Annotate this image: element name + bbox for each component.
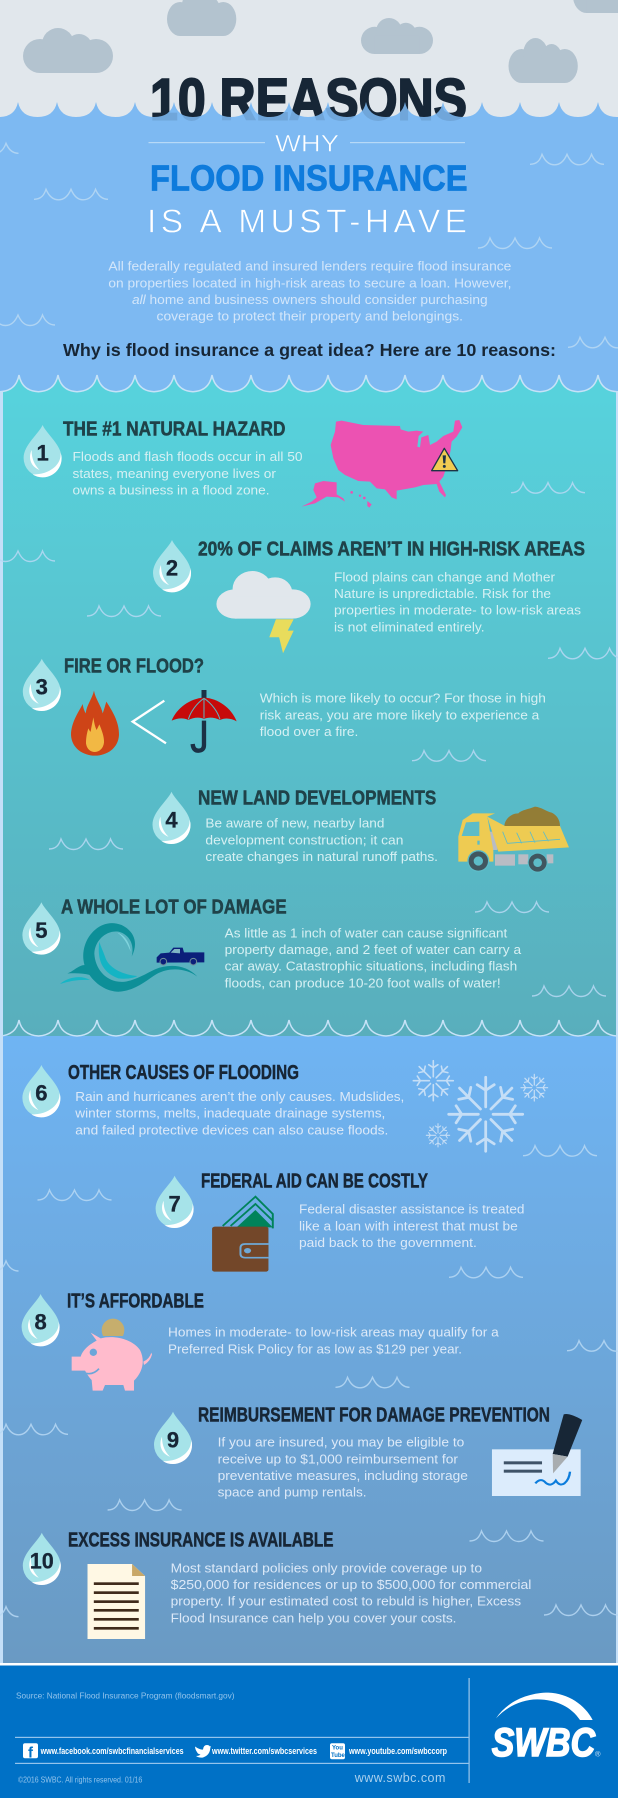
heading 4: NEW LAND DEVELOPMENTS [198,787,436,809]
heading 8: IT’S AFFORDABLE [67,1291,204,1313]
icon: drop 7 [156,1176,194,1228]
text 6: winter storms, melts, inadequate drainage systems, [74,1106,385,1121]
SWBC logo: SWBC [492,1721,596,1765]
text 5: property damage, and 2 feet of water can carry a [225,942,522,957]
icon: wave and pickup truck [60,923,204,992]
sky background [0,0,618,125]
text 9: receive up to $1,000 reimbursement for [218,1451,459,1466]
text 4 [205,816,438,864]
youtube link: Tube [331,1753,346,1759]
title: 10 reasons: 10 REASONS [150,68,467,132]
text 6 [74,1089,404,1137]
text 7: Federal disaster assistance is treated [299,1202,524,1217]
text 10 [171,1560,532,1625]
icon: drop 10: 10 [30,1548,54,1573]
text 6: Rain and hurricanes aren’t the only causes. Mudslides, [75,1089,404,1104]
text 10: Flood Insurance can help you cover your costs. [171,1610,456,1625]
text 3: Which is more likely to occur? For those in high [260,691,546,706]
panel: reason 5 [22,896,522,992]
text 8: Homes in moderate- to low-risk areas may qualify for a [168,1325,499,1340]
icon: flame, less-than, umbrella [71,690,237,756]
youtube link: www.youtube.com/swbccorp [348,1746,447,1756]
text 3: flood over a fire. [260,724,358,739]
text 9: If you are insured, you may be eligible to [218,1435,464,1450]
icon: drop 4 [152,792,191,844]
text 1 [72,449,302,498]
icon: drop 4: 4 [165,807,178,832]
text 6: and failed protective devices can also cause floods. [75,1122,388,1137]
water surface scallops [0,102,618,394]
panel: reason 9 [154,1404,582,1500]
icon: storm cloud [216,571,311,653]
text 4: Be aware of new, nearby land [205,816,384,831]
footer [0,1663,618,1798]
twitter link [195,1745,317,1758]
icon: drop 3: 3 [36,674,48,699]
icon: drop 8 [22,1294,60,1346]
facebook link: www.facebook.com/swbcfinancialservices [40,1746,184,1756]
text 2 [334,569,582,634]
icon: drop 9 [154,1412,192,1464]
icon: drop 10 [23,1533,61,1585]
heading: why: WHY [275,131,339,158]
text 5: floods, can produce 10-20 foot walls of water! [225,975,501,990]
section background: teal [0,375,618,1040]
copyright: ©2016 SWBC. All rights reserved. 01/16 [18,1775,143,1784]
text 10: Most standard policies only provide coverage up to [171,1560,482,1575]
heading 10: EXCESS INSURANCE IS AVAILABLE [68,1529,334,1551]
intro paragraph [108,259,511,324]
text 5: As little as 1 inch of water can cause significant [225,925,508,940]
text 3: risk areas, you are more likely to experience a [260,707,540,722]
text 2: is not eliminated entirely. [334,619,485,634]
intro paragraph: on properties located in high-risk areas to secure a loan. However, [108,275,511,290]
icon: check and pen [492,1414,582,1496]
intro paragraph: All federally regulated and insured lenders require flood insurance [108,259,511,274]
text 10: $250,000 for residences or up to $500,000 for commercial [171,1577,532,1592]
text 7: like a loan with interest that must be [299,1218,518,1233]
text 4: create changes in natural runoff paths. [205,849,438,864]
twitter link: www.twitter.com/swbcservices [211,1746,317,1756]
heading: is a must-have: IS A MUST-HAVE [147,204,467,241]
facebook link: f [28,1744,34,1762]
text 2: Flood plains can change and Mother [334,569,556,584]
text 9 [218,1435,468,1500]
text 9: space and pump rentals. [218,1485,367,1500]
panel: reason 1 [24,419,462,508]
text 10: property. If your estimated cost to rebuld is higher, Excess [171,1594,522,1609]
heading 3: FIRE OR FLOOD? [64,656,204,678]
section background: blue [0,1036,618,1663]
text 7 [299,1202,524,1250]
panel: reason 6 [22,1061,548,1151]
icon: piggy bank [72,1319,152,1391]
heading 7: FEDERAL AID CAN BE COSTLY [201,1171,428,1193]
heading: flood insurance: FLOOD INSURANCE [150,158,468,199]
title reflection [150,68,467,132]
text 7: paid back to the government. [299,1235,477,1250]
text 5 [225,925,522,990]
facebook link [23,1743,184,1762]
intro paragraph: coverage to protect their property and belongings. [156,309,463,324]
icon: drop 3 [23,659,61,711]
panel: reason 8 [22,1291,499,1391]
text 1: owns a business in a flood zone. [72,483,270,498]
youtube link: You [332,1746,343,1752]
SWBC logo [492,1693,601,1765]
text 5: car away. Catastrophic situations, including flash [225,959,517,974]
panel: reason 10 [23,1529,532,1639]
text 1: Floods and flash floods occur in all 50 [72,449,302,464]
heading 6: OTHER CAUSES OF FLOODING [68,1062,299,1084]
youtube link [330,1743,447,1759]
icon: US map with warning sign [302,420,462,508]
icon: drop 6: 6 [35,1081,48,1106]
icon: drop 8: 8 [34,1310,47,1335]
heading 5: A WHOLE LOT OF DAMAGE [61,896,287,918]
subheading question: Why is flood insurance a great idea? Here are 10 reasons: [63,340,556,360]
icon: drop 2: 2 [166,556,178,581]
text 3 [260,691,546,739]
clouds [23,0,618,83]
panel: reason 4 [152,787,569,873]
icon: drop 7: 7 [168,1191,181,1216]
text 8 [168,1325,499,1356]
text 1: states, meaning everyone lives or [72,466,277,481]
panel: reason 3 [23,656,546,756]
text 9: preventative measures, including storage [218,1468,468,1483]
text 2: Nature is unpredictable. Risk for the [334,586,551,601]
icon: wallet with money [212,1197,273,1272]
panel: reason 2 [153,539,585,653]
icon: drop 2 [153,540,191,592]
icon: drop 1 [24,425,62,477]
icon: snowflakes [413,1061,548,1151]
text 4: development construction; it can [205,832,403,847]
text 2: properties in moderate- to low-risk areas [334,603,582,618]
icon: dump truck [458,807,569,873]
panel: reason 7 [156,1171,524,1272]
text 8: Preferred Risk Policy for as low as $129 per year. [168,1341,462,1356]
intro paragraph: all home and business owners should consider purchasing [132,292,488,307]
icon: drop 1: 1 [36,441,49,466]
SWBC logo: ® [595,1750,601,1758]
website: www.swbc.com [354,1771,445,1785]
icon: document [88,1564,145,1639]
icon: drop 9: 9 [167,1427,179,1452]
icon: drop 5: 5 [35,918,48,943]
icon: drop 6 [22,1065,60,1117]
icon: drop 5 [22,902,60,955]
source note: Source: National Flood Insurance Program (floodsmart.gov) [16,1690,235,1700]
heading 1: THE #1 NATURAL HAZARD [63,419,285,441]
